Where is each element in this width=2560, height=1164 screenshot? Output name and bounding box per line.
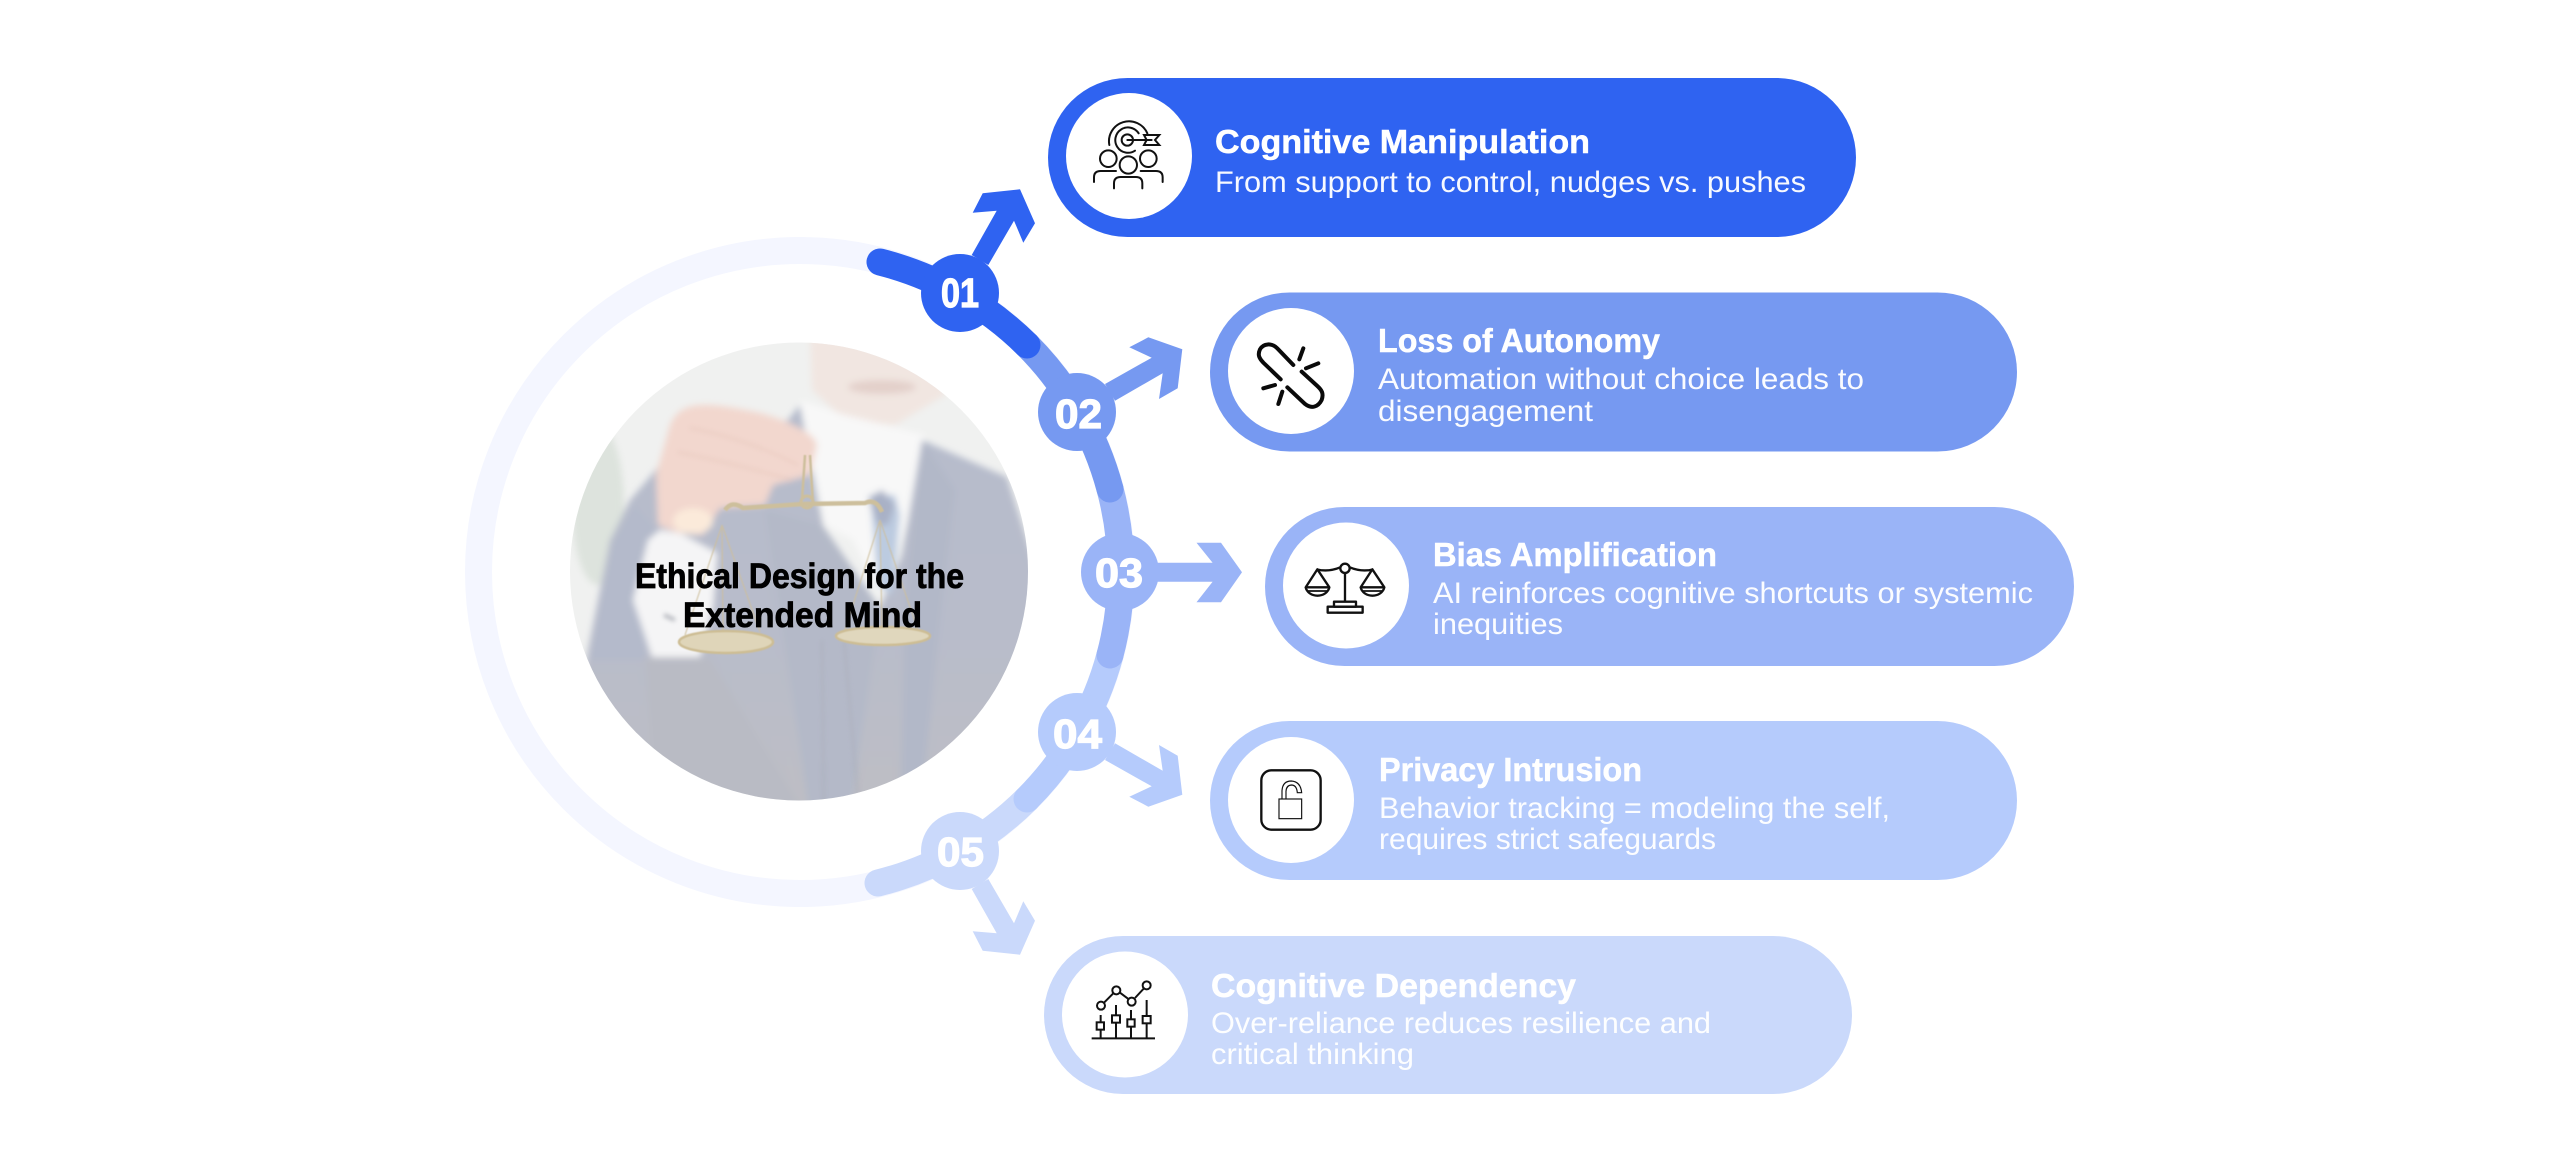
centre title: Ethical Design for the [635, 557, 964, 596]
scale held in hand [679, 455, 930, 653]
step numbers [937, 270, 1143, 875]
arc and arrow step 03 [1081, 489, 1242, 655]
panel: cognitive dependency: Cognitive Dependency [1211, 967, 1577, 1004]
central photo: man holding scales [570, 342, 1028, 800]
step numbers: 01 [941, 270, 979, 316]
infographic canvas [465, 78, 2074, 1094]
arc and arrow step 04 [1027, 655, 1182, 807]
icon: open padlock [1261, 770, 1321, 830]
panel: cognitive manipulation [1048, 78, 1856, 237]
icon: chart with candlesticks [1092, 981, 1155, 1038]
step numbers: 02 [1055, 391, 1102, 437]
panel: privacy intrusion: requires strict safeguards [1379, 823, 1716, 856]
arc and arrow step 05 [878, 799, 1035, 955]
arc and arrow step 01 [880, 189, 1035, 345]
arc and arrow step 02 [1027, 337, 1182, 489]
panel: bias amplification: Bias Amplification [1433, 536, 1717, 573]
panel: bias amplification: AI reinforces cognitive shortcuts or systemic [1433, 577, 2033, 610]
step numbers: 03 [1095, 550, 1143, 596]
panel: privacy intrusion [1210, 721, 2017, 880]
panel: privacy intrusion: Privacy Intrusion [1379, 751, 1642, 788]
panel: loss of autonomy: Automation without choice leads to [1378, 363, 1864, 396]
centre title [635, 557, 964, 635]
step numbers: 05 [937, 829, 984, 875]
panel: bias amplification [1265, 507, 2074, 666]
panel: cognitive manipulation: Cognitive Manipulation [1215, 123, 1590, 160]
icon: balance scales [1306, 564, 1384, 613]
panel: cognitive dependency [1044, 936, 1852, 1094]
panel: cognitive dependency: critical thinking [1211, 1038, 1414, 1071]
panel: loss of autonomy [1210, 292, 2017, 452]
icon: broken chain link [1259, 344, 1323, 407]
panel: loss of autonomy: disengagement [1378, 395, 1594, 428]
step numbers: 04 [1053, 711, 1102, 757]
outer pale ring [478, 250, 1122, 894]
panel: bias amplification: inequities [1433, 608, 1563, 641]
panel: loss of autonomy: Loss of Autonomy [1378, 322, 1661, 359]
panel: cognitive dependency: Over-reliance reduces resilience and [1211, 1007, 1711, 1040]
panel: cognitive manipulation: From support to control, nudges vs. pushes [1215, 166, 1806, 199]
centre title: Extended Mind [683, 596, 922, 635]
icon: target and people [1094, 121, 1163, 188]
panel: privacy intrusion: Behavior tracking = modeling the self, [1379, 792, 1890, 825]
